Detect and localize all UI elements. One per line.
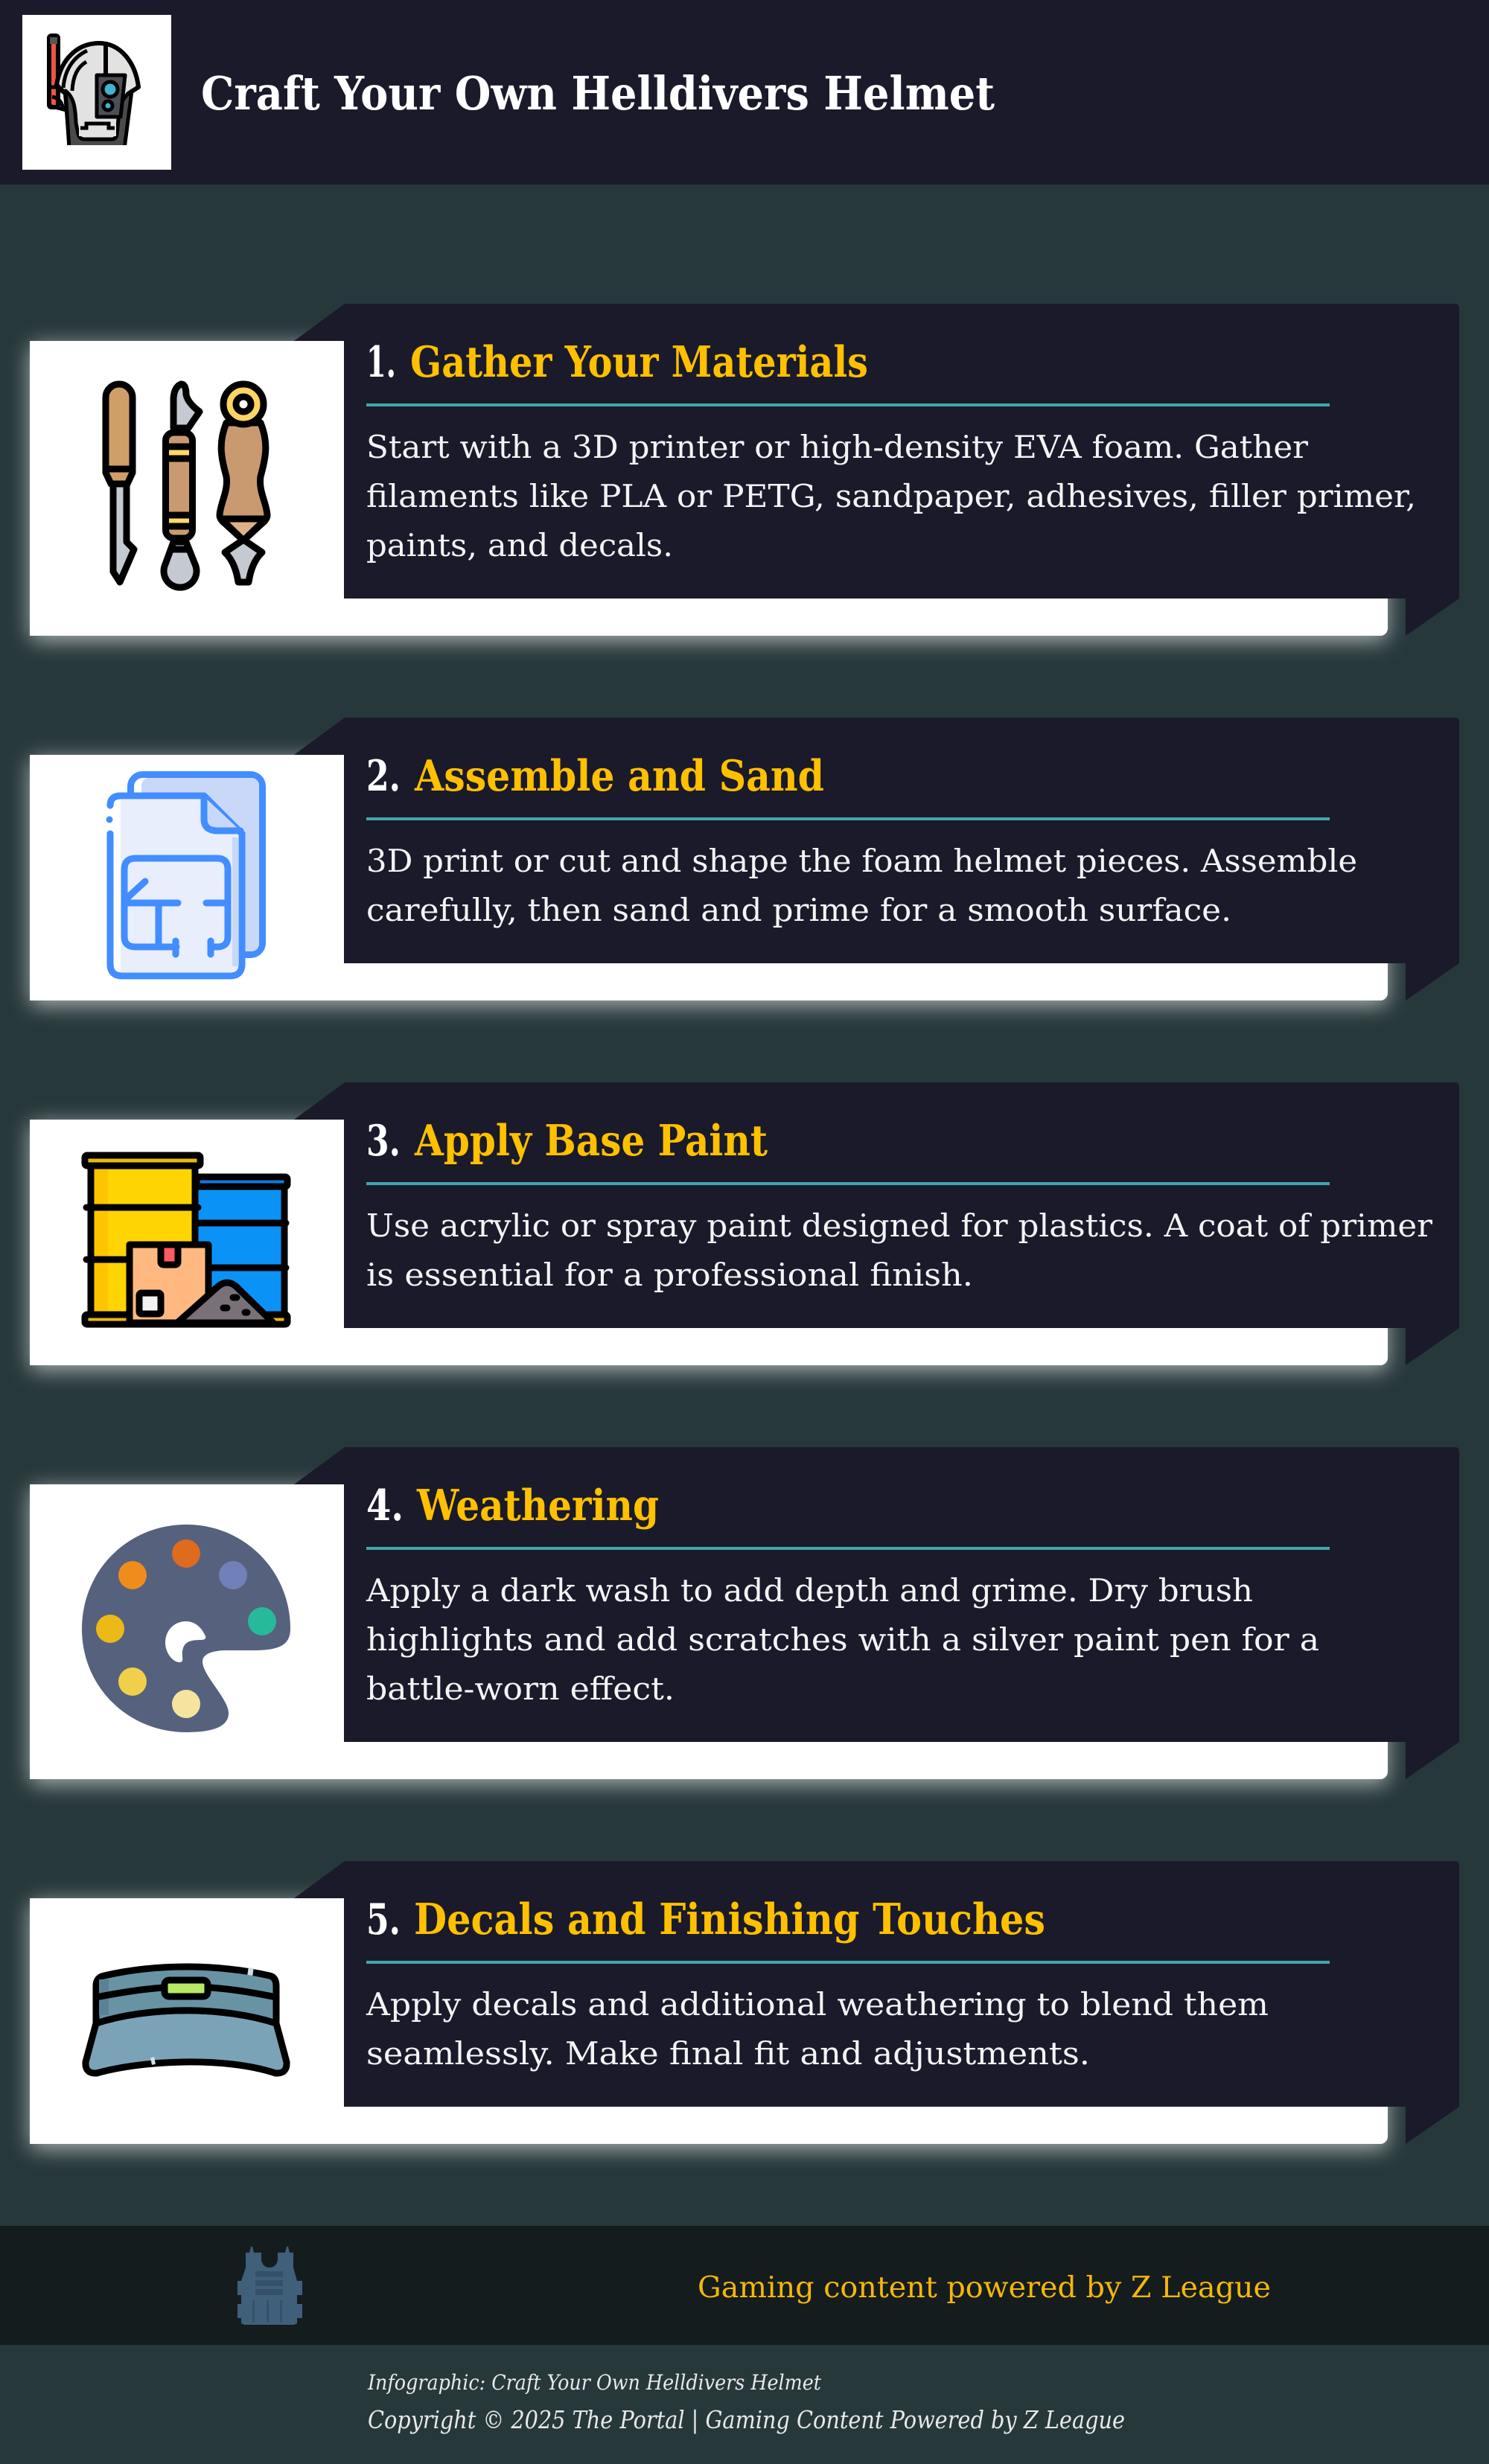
- icon: tactical vest: [237, 2247, 302, 2325]
- body text: is essential for a professional finish.: [366, 1257, 973, 1293]
- heading: 5.: [366, 1895, 401, 1944]
- heading: Assemble and Sand: [414, 751, 824, 801]
- body text: Apply decals and additional weathering to blend them: [366, 1986, 1269, 2023]
- icon: visor: [86, 1967, 287, 2073]
- footer text: [367, 2370, 1125, 2434]
- footer text: Copyright © 2025 The Portal | Gaming Content Powered by Z League: [368, 2405, 1125, 2434]
- body text: filaments like PLA or PETG, sandpaper, adhesives, filler primer,: [366, 478, 1416, 514]
- card 3: apply base paint: [30, 1082, 1459, 1370]
- icon: barrels and box: [85, 1155, 287, 1324]
- footer text: Infographic: Craft Your Own Helldivers Helmet: [367, 2370, 822, 2395]
- icon: craft tools: [106, 384, 267, 587]
- body text: Apply a dark wash to add depth and grime. Dry brush: [366, 1572, 1253, 1609]
- header bar: [0, 0, 1489, 185]
- heading: 2.: [366, 751, 401, 801]
- logo: helmet icon: [22, 15, 171, 170]
- body text: [366, 1572, 1319, 1707]
- body text: 3D print or cut and shape the foam helmet pieces. Assemble: [366, 843, 1357, 879]
- card 4: weathering: [30, 1447, 1459, 1784]
- body text: seamlessly. Make final fit and adjustments.: [366, 2035, 1090, 2072]
- heading: Apply Base Paint: [414, 1116, 768, 1166]
- heading: 4.: [366, 1481, 404, 1531]
- body text: carefully, then sand and prime for a smooth surface.: [366, 892, 1231, 928]
- card 1: gather materials: [30, 304, 1459, 641]
- sponsor text: Gaming content powered by Z League: [698, 2271, 1271, 2305]
- body text: [366, 843, 1357, 928]
- heading: Gather Your Materials: [410, 337, 868, 387]
- sponsor band: [0, 2226, 1489, 2345]
- body text: paints, and decals.: [366, 527, 673, 564]
- heading: 3.: [366, 1116, 401, 1166]
- card 2: assemble and sand: [30, 718, 1459, 1006]
- body text: [366, 429, 1416, 564]
- body text: highlights and add scratches with a silver paint pen for a: [366, 1621, 1319, 1658]
- icon: paint palette: [82, 1525, 290, 1732]
- icon: blueprint document: [106, 774, 262, 976]
- heading: 1.: [366, 337, 396, 387]
- body text: Start with a 3D printer or high-density EVA foam. Gather: [366, 429, 1309, 465]
- body text: Use acrylic or spray paint designed for plastics. A coat of primer: [366, 1207, 1433, 1244]
- heading: Decals and Finishing Touches: [414, 1895, 1045, 1944]
- heading: Weathering: [416, 1481, 659, 1531]
- body text: battle-worn effect.: [366, 1670, 675, 1707]
- body text: [366, 1207, 1433, 1293]
- title: Craft Your Own Helldivers Helmet: [201, 66, 995, 121]
- card 5: decals and finishing touches: [30, 1861, 1459, 2149]
- body text: [366, 1986, 1269, 2072]
